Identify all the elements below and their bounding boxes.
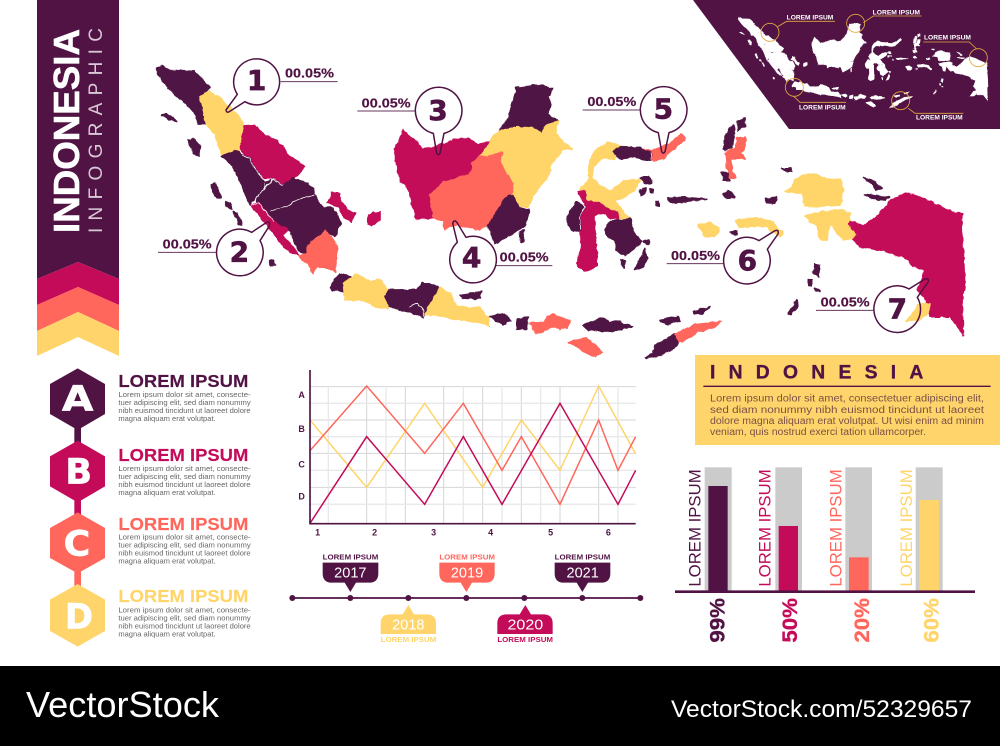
callouts 5 to 7: 6 (738, 244, 757, 277)
callouts 1 to 4: 00.05% (362, 95, 411, 110)
text panel: Indonesia: veniam, quis nostrud exerci tation ullamcorper. (710, 427, 926, 438)
legend A to D: tuer adipiscing elit, sed diam nonummy (118, 540, 251, 549)
footer watermark bar: VectorStock (26, 684, 220, 725)
legend A to D: tuer adipiscing elit, sed diam nonummy (118, 614, 251, 623)
timeline (289, 555, 643, 644)
legend A to D: magna aliquam erat volutpat. (118, 630, 216, 639)
legend A to D: Lorem ipsum dolor sit amet, consecte- (118, 606, 251, 615)
callouts 1 to 4: 00.05% (285, 66, 334, 81)
title banner: INFOGRAPHIC (86, 28, 107, 233)
line chart: 1 (315, 527, 320, 537)
bar chart: LOREM IPSUM (897, 469, 916, 587)
timeline: LOREM IPSUM (555, 555, 611, 562)
inset locator map panel: LOREM IPSUM (873, 9, 920, 16)
callouts 1 to 4: 3 (428, 94, 448, 127)
timeline: LOREM IPSUM (381, 637, 437, 644)
callouts 5 to 7: 00.05% (821, 295, 870, 310)
line chart (298, 370, 636, 537)
legend A to D: nibh euismod tincidunt ut laoreet dolore (118, 622, 251, 631)
timeline: 2020 (507, 617, 543, 633)
callouts 1 to 4: 00.05% (500, 250, 549, 265)
callouts 5 to 7: 5 (654, 93, 673, 126)
legend A to D: magna aliquam erat volutpat. (118, 556, 216, 565)
legend A to D: Lorem ipsum dolor sit amet, consecte- (118, 532, 251, 541)
bar chart: 99% (705, 598, 729, 643)
line chart: C (298, 459, 305, 469)
legend A to D: tuer adipiscing elit, sed diam nonummy (118, 398, 251, 407)
callouts 5 to 7 (583, 87, 928, 332)
timeline: 2018 (392, 617, 424, 633)
line chart: 2 (372, 527, 377, 537)
legend A to D: nibh euismod tincidunt ut laoreet dolore (118, 548, 251, 557)
bar chart: 60% (919, 598, 943, 643)
text panel: Indonesia: Lorem ipsum dolor sit amet, consectetuer adipiscing elit, (710, 394, 984, 405)
callouts 1 to 4: 4 (462, 241, 481, 274)
line chart: A (298, 390, 305, 400)
bar chart: 50% (778, 598, 802, 643)
legend A to D (50, 368, 251, 647)
title banner (37, 0, 119, 356)
line chart: 5 (548, 527, 553, 537)
legend A to D: magna aliquam erat volutpat. (118, 488, 216, 497)
bar chart: 20% (850, 598, 874, 643)
legend A to D: LOREM IPSUM (118, 445, 248, 465)
bar chart: LOREM IPSUM (756, 469, 775, 587)
line chart: 4 (488, 527, 493, 537)
bar chart: LOREM IPSUM (685, 469, 704, 587)
callouts 1 to 4 (158, 59, 552, 283)
callouts 5 to 7: 7 (888, 293, 907, 326)
footer watermark bar (0, 666, 1000, 746)
callouts 1 to 4: 2 (230, 235, 249, 268)
legend A to D: Lorem ipsum dolor sit amet, consecte- (118, 464, 251, 473)
timeline: 2017 (334, 565, 366, 581)
legend A to D: magna aliquam erat volutpat. (118, 414, 216, 423)
callouts 1 to 4: 00.05% (163, 237, 212, 252)
legend A to D: LOREM IPSUM (118, 514, 248, 534)
line chart: 6 (606, 527, 611, 537)
text panel: Indonesia (695, 355, 1000, 445)
legend A to D: A (62, 380, 94, 420)
callouts 1 to 4: 1 (247, 64, 266, 97)
legend A to D: nibh euismod tincidunt ut laoreet dolore (118, 480, 251, 489)
callouts 5 to 7: 00.05% (587, 94, 636, 109)
text panel: Indonesia: dolore magna aliquam erat volutpat. Ut wisi enim ad minim (710, 416, 984, 427)
title banner: INDONESIA (46, 29, 87, 233)
text panel: Indonesia: sed diam nonummy nibh euismod tincidunt ut laoreet (710, 405, 984, 416)
legend A to D: D (65, 597, 93, 637)
inset locator map panel: LOREM IPSUM (799, 104, 846, 111)
text panel: Indonesia: INDONESIA (710, 362, 923, 383)
map of Indonesia (156, 65, 965, 358)
timeline: LOREM IPSUM (439, 555, 495, 562)
inset locator map panel: LOREM IPSUM (916, 114, 963, 121)
line chart: D (298, 491, 305, 501)
timeline: LOREM IPSUM (323, 555, 379, 562)
legend A to D: B (65, 452, 92, 492)
legend A to D: LOREM IPSUM (118, 371, 248, 391)
inset locator map panel: LOREM IPSUM (924, 34, 971, 41)
inset locator map panel: LOREM IPSUM (787, 14, 833, 21)
timeline: 2019 (451, 565, 483, 581)
inset locator map panel (693, 0, 1000, 129)
footer watermark bar: VectorStock.com/52329657 (671, 696, 972, 723)
legend A to D: C (64, 525, 90, 565)
legend A to D: LOREM IPSUM (118, 586, 248, 606)
timeline: 2021 (566, 565, 599, 581)
line chart: B (298, 424, 305, 434)
timeline: LOREM IPSUM (497, 637, 553, 644)
legend A to D: Lorem ipsum dolor sit amet, consecte- (118, 390, 251, 399)
bar chart: LOREM IPSUM (826, 469, 845, 587)
legend A to D: tuer adipiscing elit, sed diam nonummy (118, 472, 251, 481)
line chart: 3 (431, 527, 436, 537)
callouts 5 to 7: 00.05% (671, 248, 720, 263)
legend A to D: nibh euismod tincidunt ut laoreet dolore (118, 406, 251, 415)
bar chart (675, 467, 975, 643)
